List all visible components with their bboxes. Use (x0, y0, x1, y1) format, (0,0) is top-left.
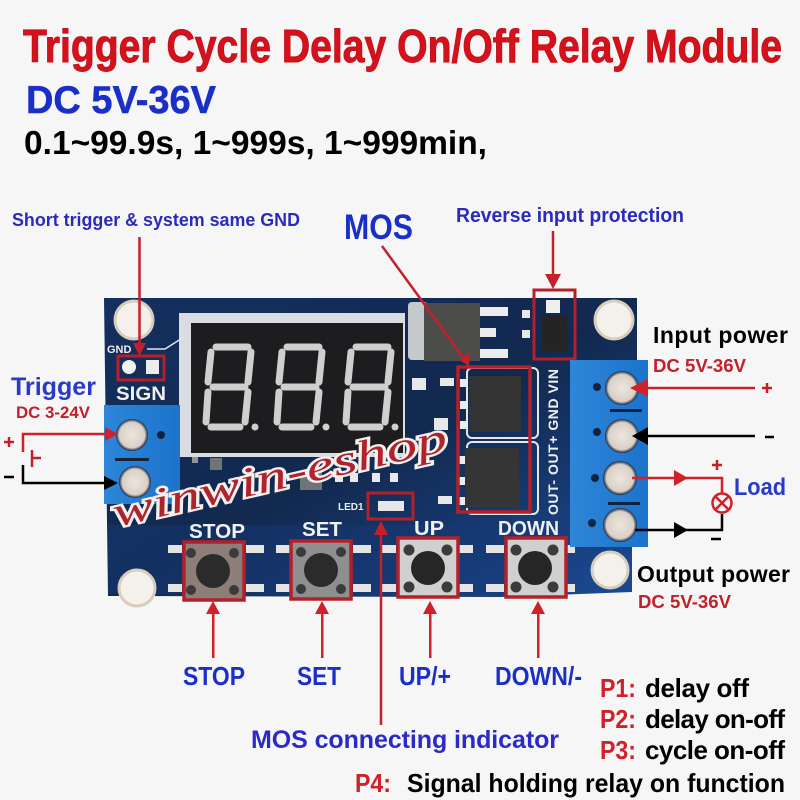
modes list (355, 673, 785, 798)
button silkscreen: DOWN (498, 518, 559, 540)
button STOP (184, 542, 244, 600)
input voltage: DC 5V-36V (653, 356, 746, 376)
modes list: P4: (355, 768, 391, 798)
terminal silkscreen: OUT- OUT+ GND VIN (545, 369, 561, 515)
label: DOWN/-: DOWN/- (495, 661, 582, 691)
arrow: short trigger (133, 237, 146, 356)
right terminal block (570, 360, 648, 547)
label: MOS: MOS (344, 208, 413, 247)
label: short trigger: Short trigger & system same GND (12, 210, 300, 230)
digit 1 (206, 347, 258, 430)
modes list: P2: (600, 704, 636, 734)
digit 3 (346, 347, 398, 430)
button DOWN (506, 538, 566, 597)
label: reverse input protection: Reverse input protection (456, 205, 684, 227)
display (179, 313, 405, 457)
small SMD parts (192, 310, 530, 504)
trigger voltage: DC 3-24V (16, 403, 91, 422)
label: UP/+: UP/+ (399, 661, 451, 691)
transistor D-pak (408, 302, 508, 361)
trigger label: Trigger (11, 373, 96, 401)
input wiring (630, 379, 774, 445)
LED indicator (368, 493, 413, 519)
modes list: Signal holding relay on function (407, 768, 785, 798)
left terminal block (104, 405, 180, 504)
button pads (168, 545, 575, 592)
voltage heading: DC 5V-36V (26, 79, 216, 122)
digit 2 (277, 347, 330, 430)
modes list: P3: (600, 735, 636, 765)
label: SET: SET (297, 661, 341, 691)
button SET (291, 541, 351, 599)
diode (534, 290, 575, 359)
silkscreen GND: GND (107, 344, 132, 356)
button silkscreen (189, 518, 559, 543)
modes list: P1: (600, 673, 636, 703)
timing ranges: 0.1~99.9s, 1~999s, 1~999min, (24, 124, 487, 161)
watermark: winwin-eshop (108, 415, 451, 537)
label: STOP: STOP (183, 661, 245, 691)
button UP (398, 538, 458, 597)
silkscreen SIGN: SIGN (116, 384, 166, 405)
button silkscreen: SET (302, 519, 342, 541)
mounting holes (115, 301, 633, 606)
output voltage: DC 5V-36V (638, 592, 731, 612)
circuit board (104, 290, 648, 606)
modes list: cycle on-off (645, 735, 785, 765)
trigger wiring with battery (4, 427, 118, 490)
MOSFET chips (457, 367, 538, 514)
arrow: reverse protection (545, 231, 561, 289)
button arrows (206, 601, 545, 658)
input power label: Input power (653, 322, 788, 348)
modes list: delay on-off (645, 704, 785, 734)
button silkscreen: STOP (189, 521, 245, 543)
modes list: delay off (645, 673, 749, 703)
silkscreen LED1: LED1 (338, 502, 364, 513)
button silkscreen: UP (414, 518, 444, 540)
arrow: MOS (382, 246, 470, 366)
load label: Load (734, 474, 786, 501)
trigger pins (118, 337, 184, 380)
load wiring with lamp (632, 460, 732, 539)
output power label: Output power (637, 561, 790, 587)
label: MOS connecting indicator: MOS connecting indicator (251, 726, 559, 754)
arrow: MOS indicator (374, 521, 388, 725)
